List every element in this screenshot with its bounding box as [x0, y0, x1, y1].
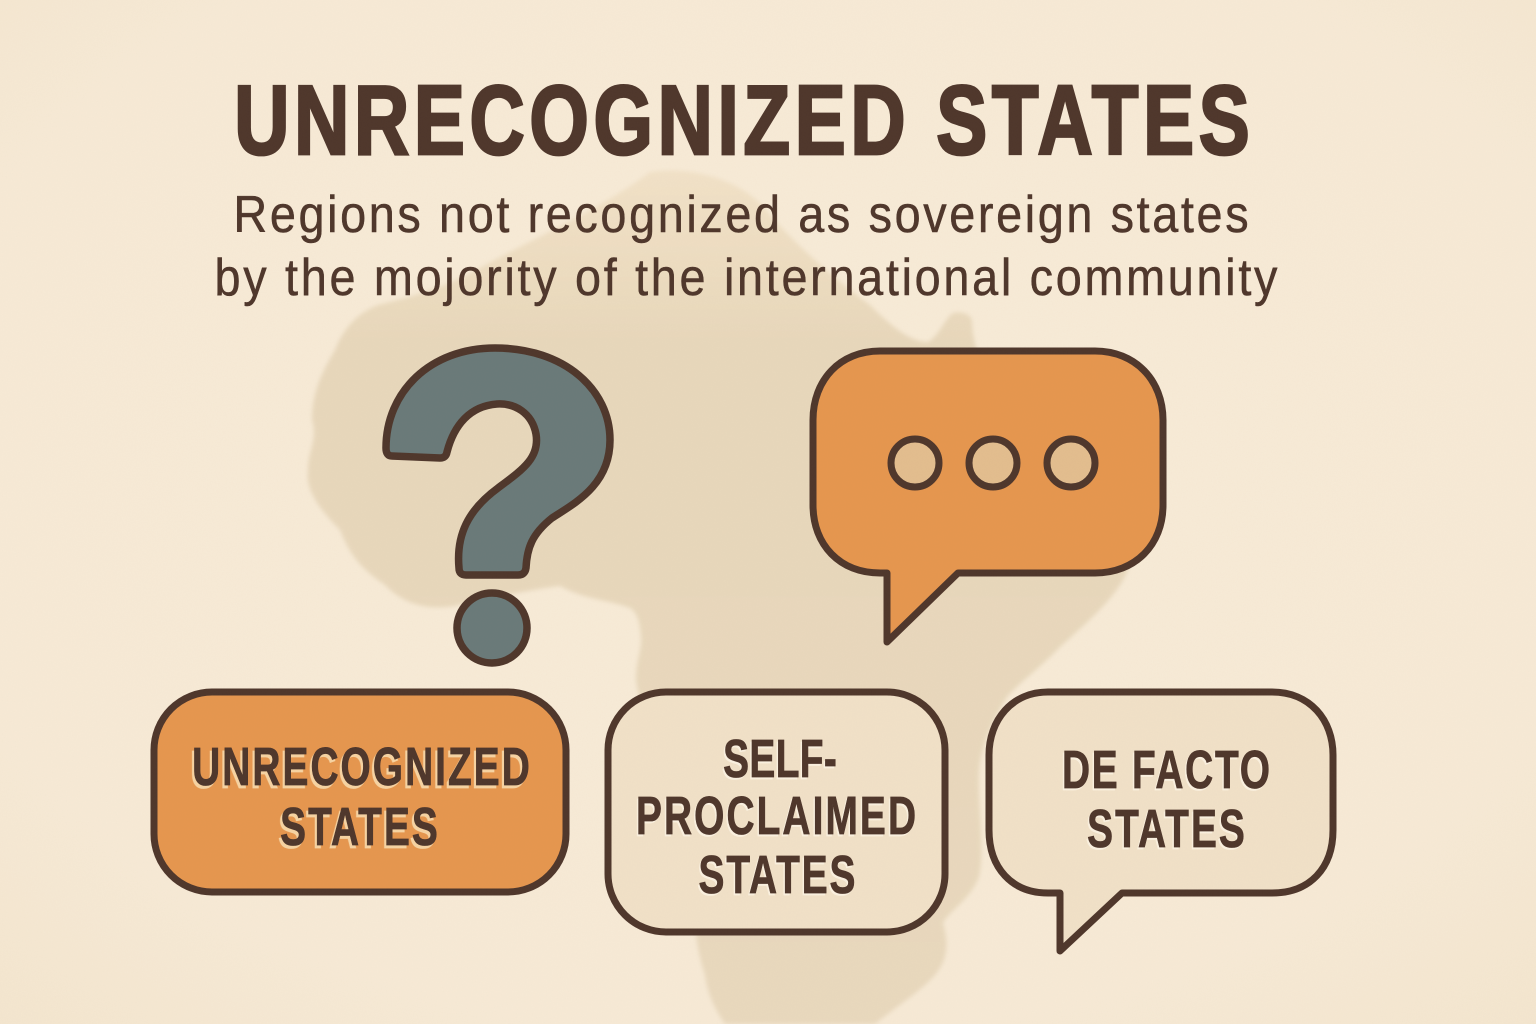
- label: unrecognized states: STATES: [280, 796, 438, 856]
- icon: speech bubble with dots: [813, 351, 1163, 642]
- icon: question mark: [386, 348, 610, 663]
- label: unrecognized states: [154, 692, 566, 892]
- label: de facto states speech bubble: DE FACTO: [1062, 739, 1270, 799]
- background map of Africa: [308, 170, 1130, 1024]
- title: UNRECOGNIZED STATES: [234, 65, 1250, 175]
- label: de facto states speech bubble: [989, 692, 1333, 951]
- label: de facto states speech bubble: STATES: [1087, 798, 1245, 858]
- subtitle: Regions not recognized as sovereign states: [233, 186, 1249, 244]
- label: self-proclaimed states: STATES: [699, 844, 855, 904]
- label: self-proclaimed states: SELF-: [723, 728, 837, 788]
- subtitle: by the mojority of the international community: [215, 249, 1278, 307]
- label: unrecognized states: UNRECOGNIZED: [192, 736, 530, 796]
- subtitle: [215, 186, 1278, 307]
- label: self-proclaimed states: [608, 692, 945, 932]
- label: self-proclaimed states: PROCLAIMED: [636, 785, 916, 845]
